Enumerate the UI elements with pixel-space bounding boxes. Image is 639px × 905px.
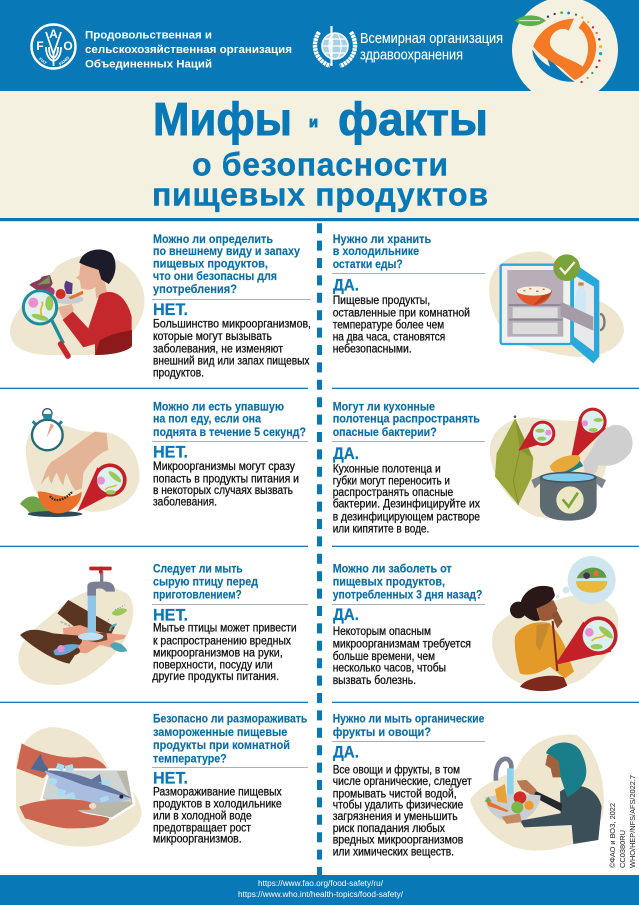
WHO emblem — [315, 26, 355, 66]
publication credits: CC0380RU — [618, 830, 627, 868]
title rule — [0, 218, 639, 221]
answer 2 — [333, 277, 470, 356]
answer 8: риск попадания любых — [333, 821, 445, 835]
footer links: https://www.fao.org/food-safety/ru/ — [258, 878, 384, 888]
answer 7: предотвращает рост — [153, 821, 252, 835]
question 5 — [153, 561, 258, 601]
question 4 — [333, 400, 480, 439]
answer 8: или химических веществ. — [333, 844, 454, 858]
answer 2: оставленные при комнатной — [333, 306, 470, 320]
answer 6: Некоторым опасным — [333, 624, 431, 638]
question 2: в холодильнике — [333, 244, 419, 258]
answer 2: ДА. — [333, 277, 359, 295]
question 2: Нужно ли хранить — [333, 232, 432, 246]
answer 8: промывать чистой водой, — [333, 786, 457, 800]
FAO logo — [32, 24, 76, 68]
question 1: Можно ли определить — [153, 232, 273, 246]
WHO name: Всемирная организация — [360, 31, 503, 47]
question 3 — [153, 400, 306, 439]
title: myths and facts: факты — [338, 93, 488, 145]
answer 1: продуктов. — [153, 366, 204, 380]
answer 5: другие продукты питания. — [152, 669, 279, 683]
illustration: towel, sponge and pot — [490, 408, 633, 521]
title panel — [0, 91, 639, 218]
answer 7: микроорганизмов. — [153, 832, 242, 846]
panel: thawing food — [16, 712, 308, 847]
answer 1: Большинство микроорганизмов, — [153, 316, 311, 330]
answer 4: ДА. — [333, 445, 359, 463]
answer 8: загрязнения и уменьшить — [333, 809, 458, 823]
answer 8: числе органические, следует — [333, 774, 472, 788]
answer 2: небезопасными. — [333, 342, 412, 356]
FAO name: Продовольственная и — [85, 30, 212, 42]
publication credits — [608, 775, 637, 868]
illustration: hands under a tap — [18, 567, 133, 685]
answer 6: несколько часов, чтобы — [333, 661, 446, 675]
answer 2: Пищевые продукты, — [333, 293, 430, 307]
footer links — [238, 878, 404, 899]
question 7 — [153, 712, 308, 765]
panel: three days ago — [332, 556, 618, 691]
answer 4: или кипятите в воде. — [333, 521, 429, 535]
header band — [0, 0, 639, 91]
question 3: на пол еду, если она — [153, 412, 261, 426]
answer 7: Размораживание пищевых — [153, 785, 282, 799]
FAO name: Объединенных Наций — [85, 58, 212, 70]
panel: smell and look — [10, 232, 311, 380]
question 1 — [153, 232, 300, 296]
panel: washing poultry — [18, 561, 308, 685]
FAO logo: PANIS — [58, 55, 70, 67]
question 8 — [333, 712, 484, 739]
subtitle: о безопасности — [192, 146, 448, 182]
question 4: опасные бактерии? — [333, 425, 437, 439]
question 3: Можно ли есть упавшую — [153, 400, 284, 414]
answer 4: распространять опасные — [333, 485, 454, 499]
answer 8: Все овощи и фрукты, в том — [333, 762, 460, 776]
question 7: замороженные пищевые — [153, 725, 287, 739]
question 2 — [333, 232, 432, 271]
illustration: thinking woman — [492, 556, 618, 691]
answer 3 — [153, 444, 299, 509]
publication credits: ©ФАО и ВОЗ, 2022 — [608, 803, 617, 868]
question 4: полотенца распространять — [333, 412, 480, 426]
question 2: остатки еды? — [333, 257, 403, 271]
question 5: Следует ли мыть — [153, 561, 243, 575]
question 8: фрукты и овощи? — [333, 725, 431, 739]
answer 3: НЕТ. — [153, 444, 188, 462]
answer 6: микроорганизмам требуется — [333, 637, 471, 651]
answer 1: заболевания, не изменяют — [153, 342, 284, 356]
answer 3: попасть в продукты питания и — [153, 471, 299, 485]
question 1: употребления? — [153, 282, 237, 296]
answer 6: ДА. — [333, 606, 359, 624]
answer 1: внешний вид или запах пищевых — [153, 354, 310, 368]
answer 3: в некоторых случаях вызвать — [153, 483, 293, 497]
answer 1: которые могут вызывать — [153, 329, 272, 343]
answer 1: НЕТ. — [153, 301, 188, 319]
panel: kitchen towels — [332, 400, 633, 535]
answer 4: бактерии. Дезинфицируйте их — [333, 497, 480, 511]
illustration: fridge — [489, 252, 624, 363]
FAO name — [85, 30, 292, 70]
question 7: температуре? — [153, 751, 227, 765]
panel: washing organic produce — [332, 712, 604, 858]
question 6: Можно ли заболеть от — [333, 561, 452, 575]
question 1: по внешнему виду и запаху — [153, 244, 300, 258]
answer 8 — [333, 743, 472, 858]
answer 6: больше времени, чем — [333, 649, 435, 663]
answer 5: Мытье птицы может привести — [153, 621, 297, 635]
subtitle: пищевых продуктов — [152, 176, 488, 212]
answer 6 — [333, 606, 471, 687]
answer 3: заболевания. — [153, 495, 217, 509]
subtitle — [152, 146, 488, 212]
answer 6: вызвать болезнь. — [333, 673, 416, 687]
title: myths and facts: и — [309, 114, 318, 131]
answer 1 — [153, 301, 311, 380]
answer 8: вредных микроорганизмов — [333, 833, 463, 847]
answer 4 — [333, 445, 480, 535]
answer 3: Микроорганизмы могут сразу — [153, 459, 295, 473]
answer 5: микроорганизмов на руки, — [153, 646, 283, 660]
footer band — [0, 875, 639, 905]
title: myths and facts: Мифы — [153, 93, 292, 145]
FAO logo: O — [63, 39, 73, 53]
panel: five second rule — [20, 400, 308, 517]
question 8: Нужно ли мыть органические — [333, 712, 484, 726]
campaign logo — [512, 0, 618, 103]
question 3: поднята в течение 5 секунд? — [153, 425, 306, 439]
answer 5: поверхности, посуду или — [153, 657, 273, 671]
illustration: woman washing vegetables — [470, 734, 604, 850]
answer 8: ДА. — [333, 743, 359, 761]
illustration: man smelling food — [10, 250, 145, 356]
answer 7: или в холодной воде — [153, 808, 252, 822]
question 6: пищевых продуктов, — [333, 575, 445, 589]
FAO logo: F — [36, 39, 44, 53]
FAO logo: FIAT — [38, 56, 48, 66]
answer 2: на два часа, становятся — [333, 330, 445, 344]
answer 7: продуктов в холодильнике — [153, 797, 282, 811]
panel: leftovers — [332, 232, 624, 363]
WHO name — [360, 31, 503, 64]
answer 7 — [153, 769, 282, 846]
question 1: что они безопасны для — [153, 269, 277, 283]
answer 7: НЕТ. — [153, 769, 188, 787]
question 6: употребленных 3 дня назад? — [333, 587, 482, 601]
answer 5 — [152, 606, 297, 683]
answer 4: в дезинфицирующем растворе — [333, 510, 480, 524]
question 7: Безопасно ли размораживать — [153, 712, 308, 726]
answer 2: температуре более чем — [333, 318, 444, 332]
FAO logo: A — [49, 27, 58, 41]
illustration: hands holding fish tray — [16, 727, 142, 847]
WHO name: здравоохранения — [360, 48, 463, 64]
publication credits: WHO/HEP/NFS/AFS/2022.7 — [628, 775, 637, 868]
answer 5: НЕТ. — [153, 606, 188, 624]
question 4: Могут ли кухонные — [333, 400, 435, 414]
question 6 — [333, 561, 482, 601]
centre dashed divider — [317, 223, 322, 875]
footer links: https://www.who.int/health-topics/food-safety/ — [238, 889, 404, 899]
title: myths and facts — [153, 93, 488, 145]
question 7: продукты при комнатной — [153, 738, 290, 752]
question 5: приготовлением? — [153, 587, 242, 601]
answer 4: Кухонные полотенца и — [333, 462, 441, 476]
question 1: пищевых продуктов, — [153, 256, 268, 270]
question 5: сырую птицу перед — [153, 575, 258, 589]
FAO name: сельскохозяйственная организация — [85, 44, 292, 56]
illustration: hand, papaya and stopwatch — [20, 409, 140, 517]
answer 4: губки могут переносить и — [333, 473, 450, 487]
answer 8: чтобы удалить физические — [333, 797, 464, 811]
answer 5: к распространению вредных — [153, 633, 291, 647]
